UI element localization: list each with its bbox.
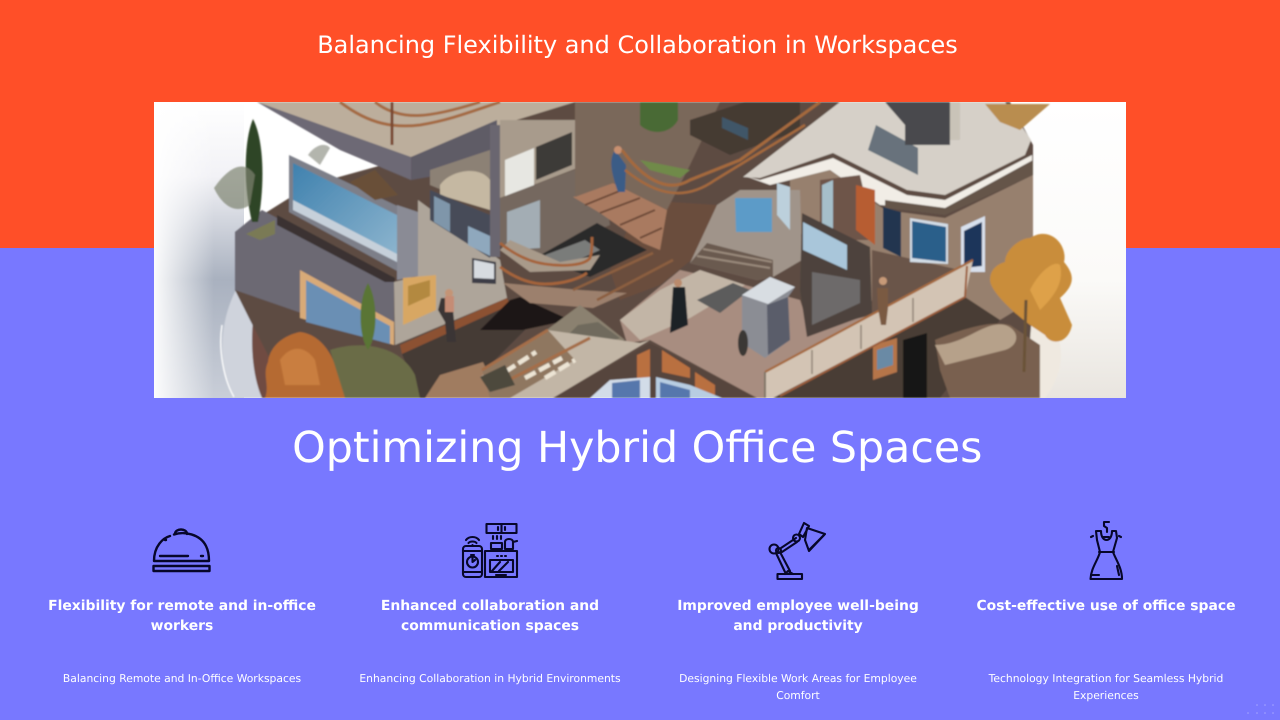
top right tree (985, 104, 1050, 130)
left lower window (300, 270, 394, 345)
left gray wall (235, 210, 394, 345)
feature label 3: and productivity (733, 618, 863, 634)
lower floor below walkway (773, 297, 1000, 398)
upper terrace right (743, 102, 1031, 195)
subtitle heading: Balancing Flexibility and Collaboration in Workspaces (317, 31, 958, 59)
feature label 4: Cost-effective use of office space (976, 598, 1236, 614)
laptop (472, 258, 496, 284)
stand display (403, 275, 436, 325)
icon: smart kitchen (462, 523, 518, 578)
wooden stair steps (573, 183, 667, 250)
left display window (289, 155, 410, 278)
orange shrub (265, 332, 350, 398)
green shrub (330, 345, 420, 398)
icon: serving cloche (152, 528, 211, 572)
person on walkway (877, 288, 888, 325)
feature description 4: Experiences (1073, 689, 1139, 702)
faint watermark dots (1247, 704, 1274, 714)
feature label 3: Improved employee well-being (677, 598, 919, 614)
feature description 3 (679, 672, 917, 702)
laptop on terrace (868, 125, 918, 175)
illustration: isometric hybrid office building (154, 102, 1126, 398)
monitor stack (885, 102, 950, 145)
feature description 3: Designing Flexible Work Areas for Employee (679, 672, 917, 685)
image background (154, 102, 1126, 398)
main heading: Optimizing Hybrid Office Spaces (292, 423, 982, 473)
blue screen (735, 198, 772, 232)
right facade (790, 170, 1033, 330)
metal cabinet (742, 277, 795, 358)
floor around blue screen (690, 190, 802, 280)
feature description 2: Enhancing Collaboration in Hybrid Environments (359, 672, 621, 685)
walkway with railing (765, 260, 973, 398)
beige ledge (480, 330, 650, 398)
small garden (640, 102, 678, 132)
stair column (610, 200, 717, 300)
pink main floor (620, 270, 900, 398)
upper left floor (257, 102, 575, 157)
central pillar and alcove (430, 150, 490, 210)
icon: desk lamp (768, 522, 826, 580)
building mass (235, 102, 1040, 398)
feature label 1: workers (151, 618, 213, 634)
lower left floor (402, 305, 525, 398)
stair landing underside (503, 283, 627, 308)
bench with papers (482, 330, 575, 398)
orange header band (0, 0, 1280, 248)
dark room under stair (537, 223, 647, 277)
feature label 3 (677, 598, 919, 634)
icon: dress on hanger (1090, 521, 1124, 580)
right interior room (800, 213, 872, 337)
feature label 2 (381, 598, 599, 634)
dark upper room (690, 102, 800, 155)
platform disc (222, 290, 640, 398)
feature label 2: Enhanced collaboration and (381, 598, 599, 614)
person with backpack (438, 298, 456, 342)
feature description 4 (988, 672, 1223, 702)
feature label 2: communication spaces (401, 618, 579, 634)
stair railings (500, 237, 592, 265)
gallery wedge below (553, 343, 757, 398)
dark underside (480, 297, 570, 330)
rear wall (500, 160, 610, 257)
bare tree (214, 166, 255, 209)
wall boards (500, 120, 585, 198)
cypress trees (246, 119, 262, 222)
floor mat (697, 283, 750, 313)
feature description 1: Balancing Remote and In-Office Workspaces (63, 672, 301, 685)
furniture zone (540, 305, 625, 355)
feature label 1 (48, 598, 316, 634)
orange tree right (990, 234, 1072, 342)
wooden railings upper (340, 102, 500, 126)
walking person (670, 287, 688, 333)
feature description 4: Technology Integration for Seamless Hybrid (989, 672, 1223, 685)
lower right mound (935, 324, 1040, 398)
feature label 1: Flexibility for remote and in-office (48, 598, 316, 614)
feature description 3: Comfort (776, 689, 820, 702)
central room floor (394, 200, 507, 345)
curved steps (690, 243, 773, 280)
upper centre rooms (575, 102, 720, 210)
